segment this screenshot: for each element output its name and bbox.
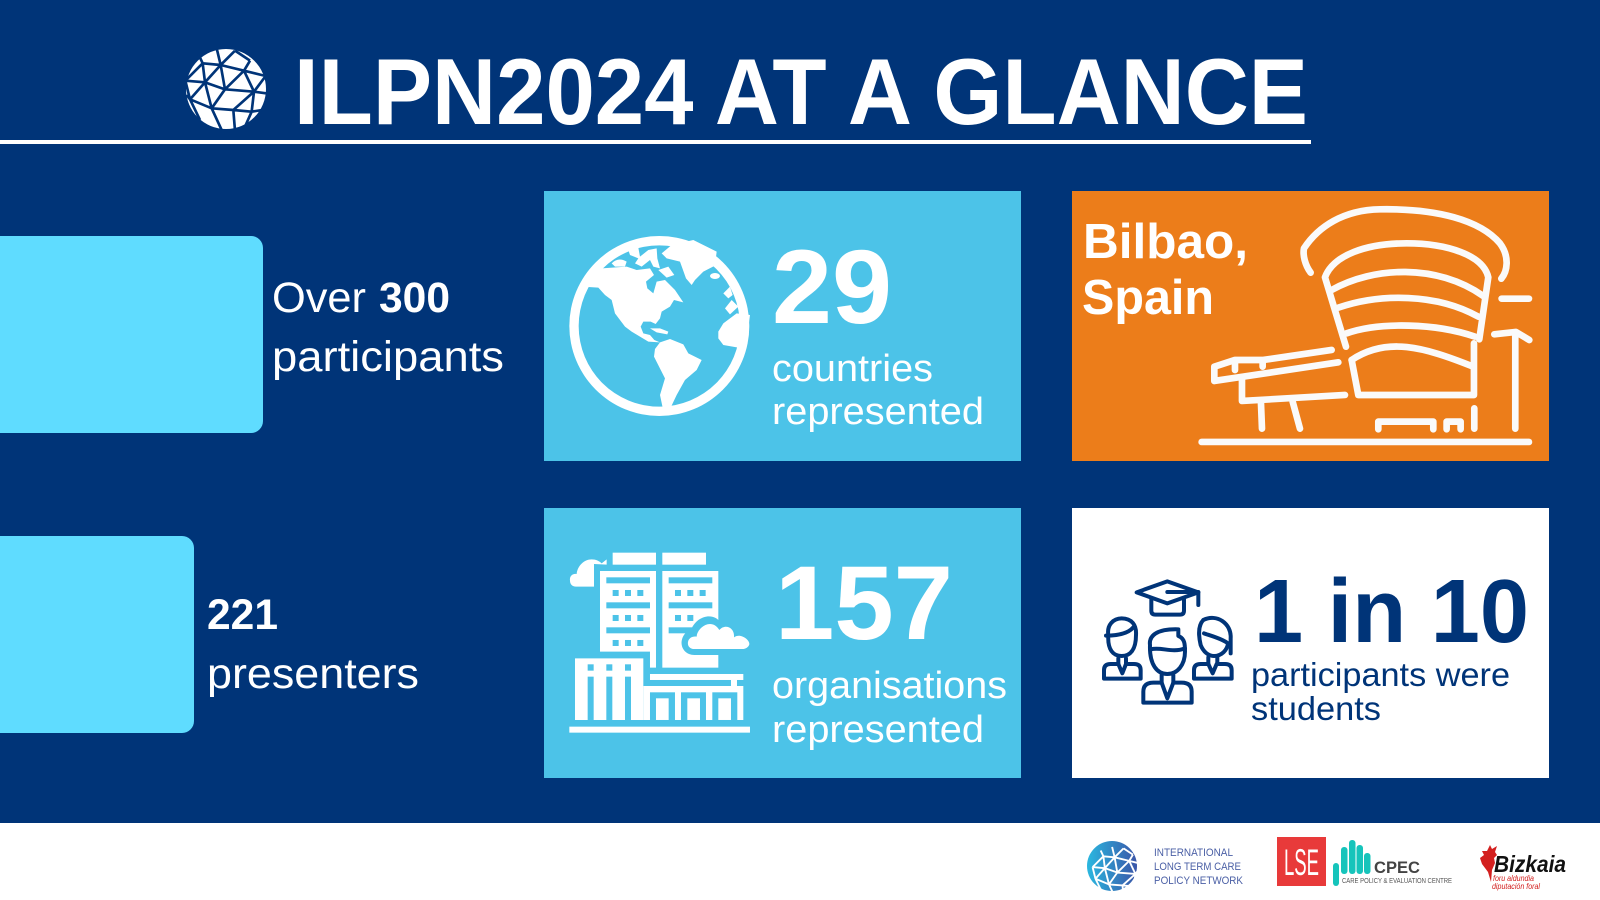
logo: Bizkaia: Bizkaia [1494,851,1566,877]
logo: CPEC: CPEC [1374,858,1420,877]
logo: CPEC: CARE POLICY & EVALUATION CENTRE [1342,878,1452,885]
bar: presenters [0,536,194,733]
caption: participants were students: participants were [1251,656,1510,693]
panel: students [1072,508,1549,778]
panel background [1072,191,1549,461]
logo: ILPN: POLICY NETWORK [1154,875,1244,887]
caption: countries represented: countries [772,348,933,390]
caption: participants were students [1251,656,1510,727]
location name [1082,215,1248,325]
number: 1 in 10: 1 in 10 [1254,562,1529,662]
logo: Bizkaia: diputación foral [1492,882,1540,891]
panel: organisations [544,508,1021,778]
text: over 300 participants: Over [272,274,366,322]
text: over 300 participants: 300 [379,274,450,322]
caption: countries represented [772,348,984,433]
panel: countries [544,191,1021,461]
stat: presenters [0,536,419,733]
logo: ILPN: INTERNATIONAL [1154,847,1233,859]
text: 221 presenters: presenters [207,650,419,698]
number: 157: 157 [775,545,953,662]
logo: Bizkaia: foru aldundia [1493,874,1534,883]
bar: participants [0,236,263,433]
title block [0,39,1311,144]
footer [0,823,1600,900]
caption: organisations represented: represented [772,709,984,751]
panel background [544,191,1021,461]
caption: countries represented: represented [772,391,984,433]
panel: Bilbao [1072,191,1549,461]
text: over 300 participants: participants [272,333,504,381]
number: 29: 29 [772,229,892,346]
footer background [0,823,1600,900]
icon: network globe [185,48,266,131]
text: 221 presenters [207,591,419,698]
logo: Bizkaia [1480,845,1566,891]
caption: participants were students: students [1251,690,1381,727]
logo: ILPN: LONG TERM CARE [1154,861,1241,873]
text: 221 presenters: 221 [207,591,278,639]
logo: LSE: LSE [1284,842,1319,883]
heading: ILPN2024 AT A GLANCE [294,39,1308,144]
caption: organisations represented [772,665,1007,751]
panel background [544,508,1021,778]
icon: office buildings [569,553,750,733]
logo: LSE [1277,837,1326,886]
location name: Spain [1082,271,1214,325]
logo: CPEC [1333,840,1452,886]
heading underline [0,140,1311,144]
icon: students with graduation cap [1104,581,1232,703]
caption: organisations represented: organisations [772,665,1007,707]
icon: Guggenheim museum [1202,209,1529,442]
stat: participants [0,236,504,433]
panel background [1072,508,1549,778]
location name: Bilbao, [1083,215,1248,269]
icon: earth globe [569,236,750,416]
text: over 300 participants [272,274,504,381]
logo: ILPN [1087,841,1244,898]
